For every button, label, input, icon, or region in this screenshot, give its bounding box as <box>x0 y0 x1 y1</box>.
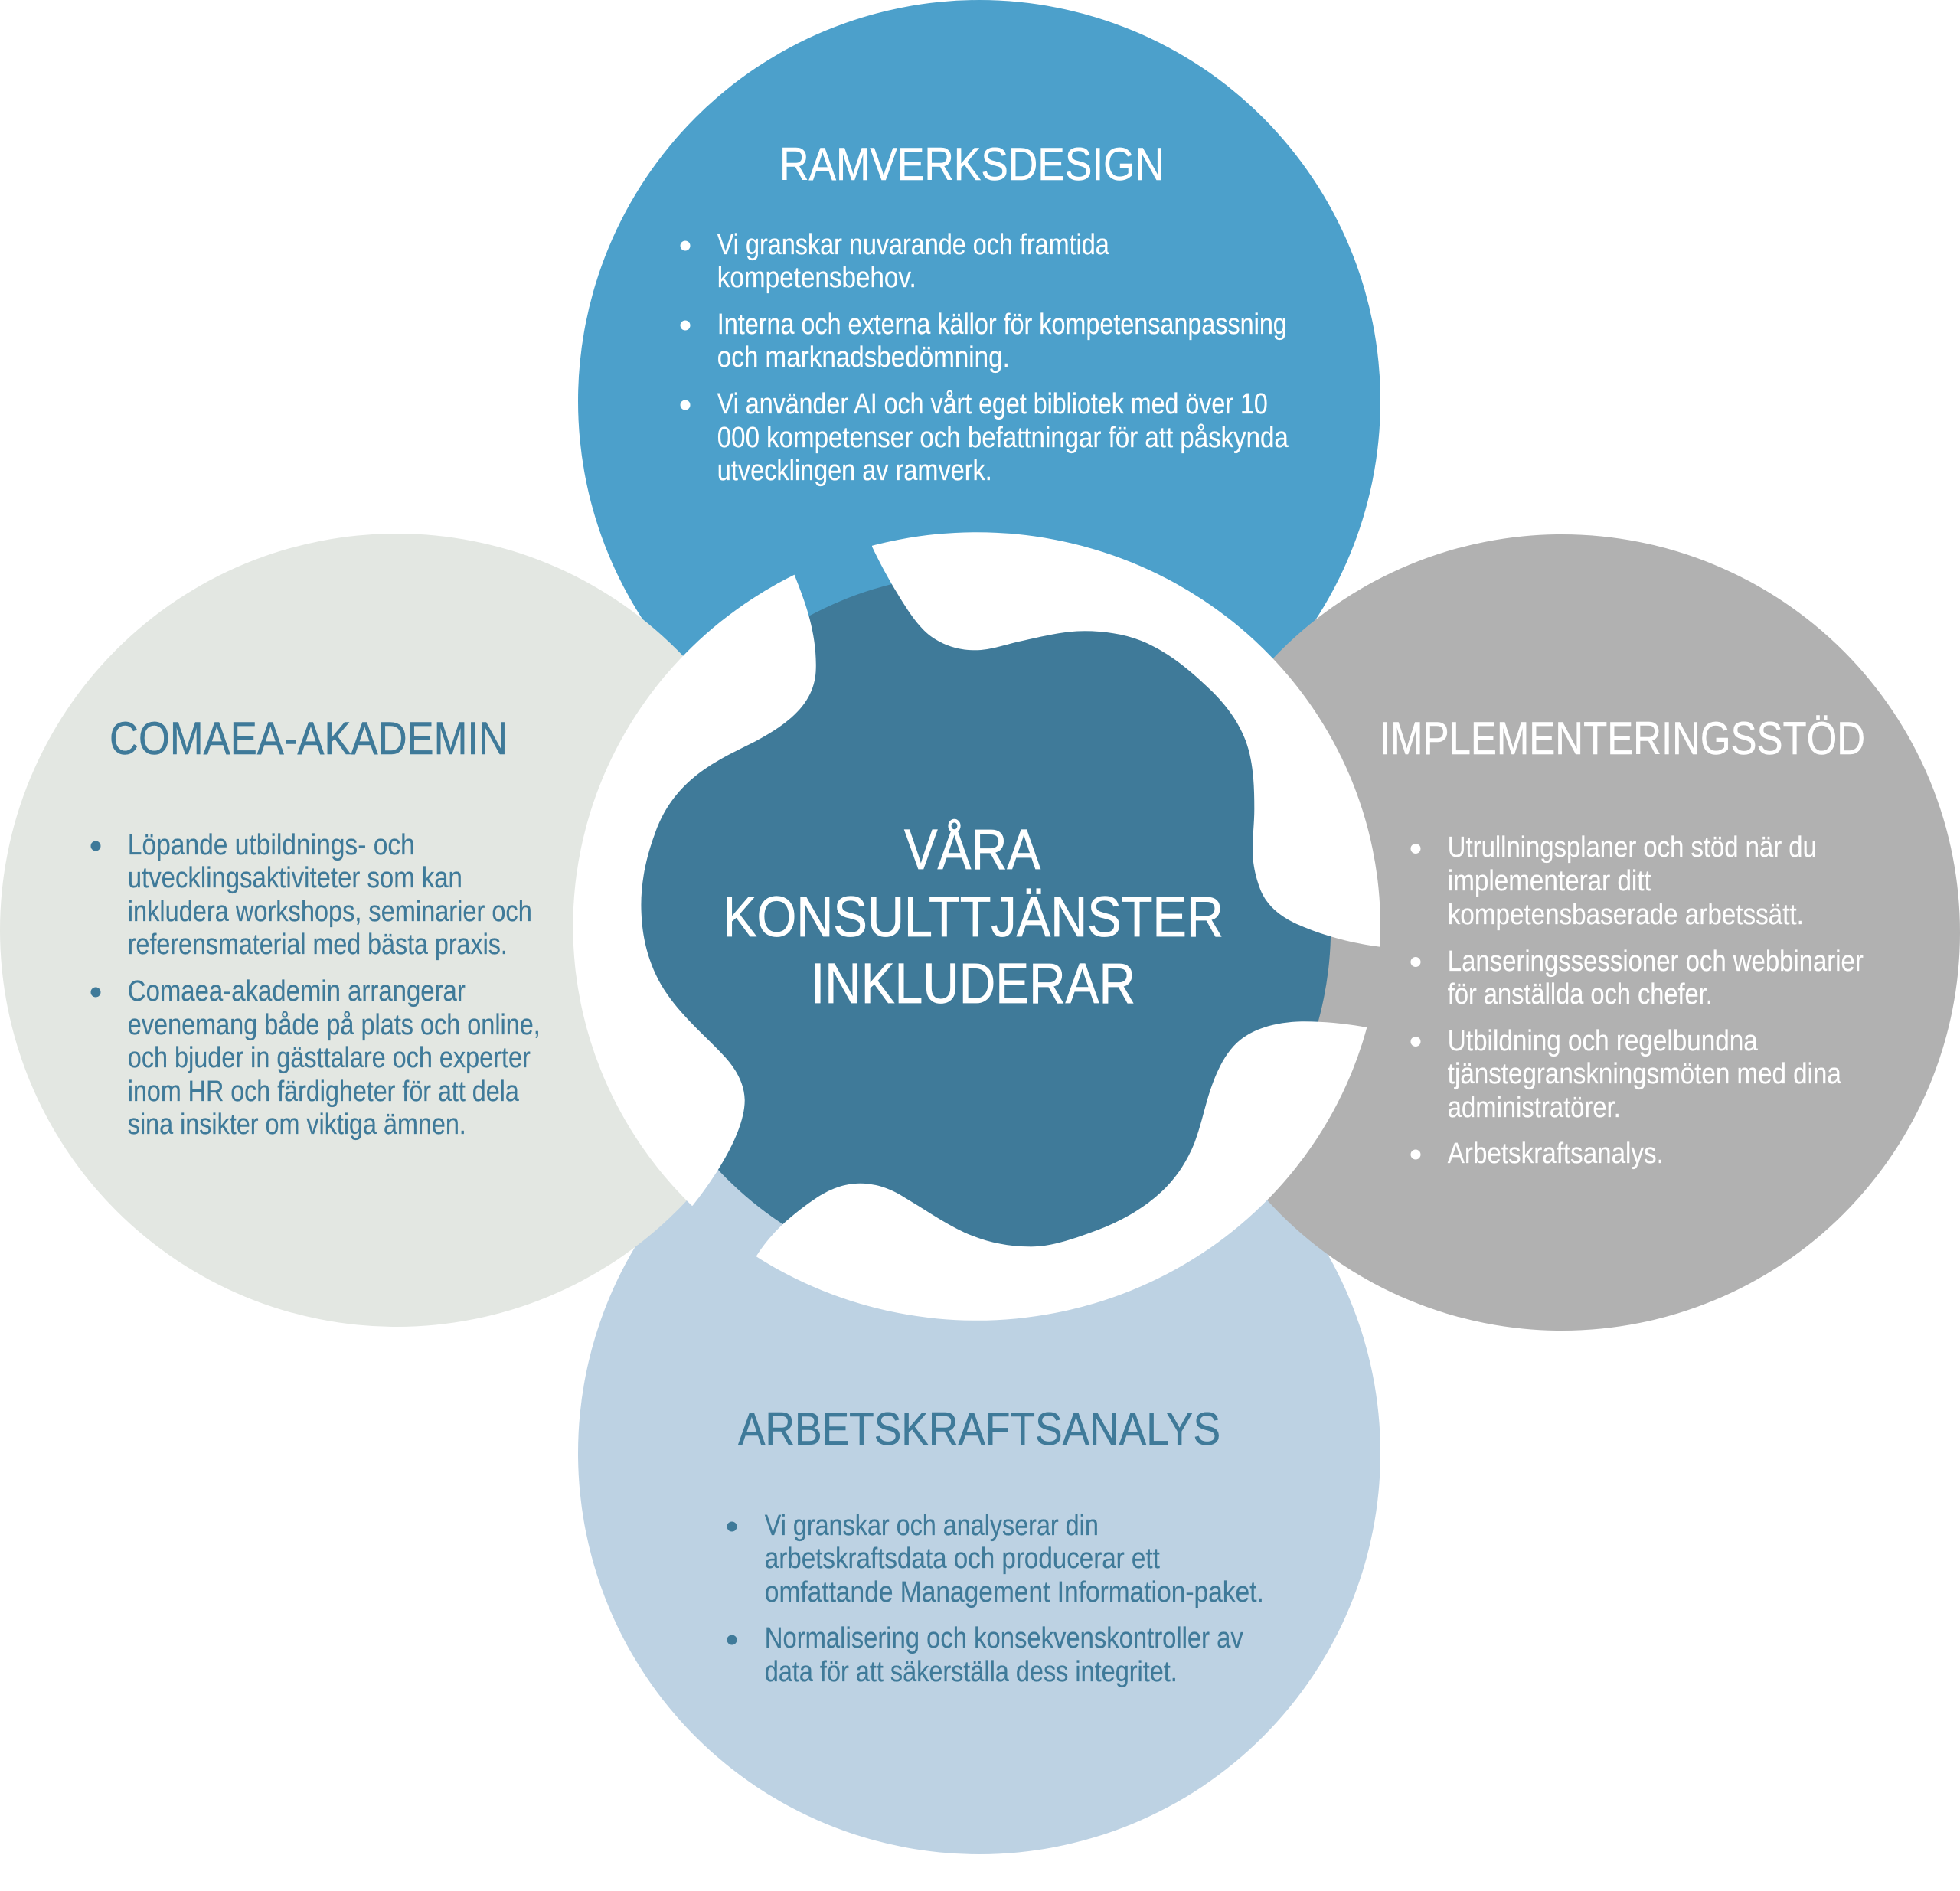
bullet list: comaea-akademin: evenemang både på plats och online, <box>128 1009 541 1041</box>
bullet list: arbetskraftsanalys: Vi granskar och analyserar din <box>765 1510 1099 1542</box>
bullet list: implementeringsstöd: Lanseringssessioner och webbinarier <box>1448 946 1864 978</box>
bullet list: comaea-akademin: referensmaterial med bästa praxis. <box>128 929 508 961</box>
bullet list: ramverksdesign: utvecklingen av ramverk. <box>717 455 992 487</box>
bullet list: implementeringsstöd: kompetensbaserade arbetssätt. <box>1448 899 1804 931</box>
bullet list: arbetskraftsanalys <box>727 1510 1264 1688</box>
bullet list: ramverksdesign: Interna och externa källor för kompetensanpassning <box>717 309 1287 341</box>
bullet list: implementeringsstöd: för anställda och chefer. <box>1448 978 1713 1011</box>
heading: implementeringsstöd: IMPLEMENTERINGSSTÖD <box>1380 713 1865 764</box>
bullet list: comaea-akademin: inkludera workshops, seminarier och <box>128 896 532 928</box>
bullet list: ramverksdesign: Vi använder AI och vårt eget bibliotek med över 10 <box>717 388 1268 420</box>
central title: VÅRA <box>904 818 1041 881</box>
bullet list: ramverksdesign <box>681 229 1289 487</box>
bullet list: implementeringsstöd: Arbetskraftsanalys. <box>1448 1138 1664 1170</box>
bullet list: comaea-akademin: utvecklingsaktiviteter som kan <box>128 862 462 894</box>
bullet list: arbetskraftsanalys: arbetskraftsdata och producerar ett <box>765 1543 1160 1575</box>
bullet list: comaea-akademin: och bjuder in gästtalare och experter <box>128 1042 531 1074</box>
bullet list: ramverksdesign: 000 kompetenser och befattningar för att påskynda <box>717 422 1289 454</box>
central swirl <box>573 532 1380 1321</box>
bullet list: ramverksdesign: Vi granskar nuvarande och framtida <box>717 229 1110 261</box>
bullet list: comaea-akademin: sina insikter om viktiga ämnen. <box>128 1109 466 1141</box>
bullet list: implementeringsstöd: tjänstegranskningsmöten med dina <box>1448 1058 1842 1090</box>
panel: implementeringsstöd <box>1164 534 1960 1331</box>
heading: ramverksdesign: RAMVERKSDESIGN <box>779 139 1165 190</box>
central title: INKLUDERAR <box>811 952 1135 1015</box>
bullet list: ramverksdesign: och marknadsbedömning. <box>717 341 1010 374</box>
bullet list: implementeringsstöd: Utbildning och regelbundna <box>1448 1025 1759 1057</box>
swirl fin: left <box>573 574 816 1206</box>
panel: comaea-akademin <box>0 534 793 1327</box>
bullet list: arbetskraftsanalys: omfattande Management Information-paket. <box>765 1576 1264 1608</box>
bullet list: comaea-akademin: Comaea-akademin arrangerar <box>128 975 466 1008</box>
bullet list: comaea-akademin: inom HR och färdigheter för att dela <box>128 1076 520 1108</box>
swirl fin: top right <box>872 532 1380 947</box>
heading: comaea-akademin: COMAEA-AKADEMIN <box>109 713 508 764</box>
central title <box>723 818 1223 1015</box>
bullet list: comaea-akademin: Löpande utbildnings- och <box>128 829 415 861</box>
bullet list: implementeringsstöd: administratörer. <box>1448 1092 1621 1124</box>
bullet list: comaea-akademin <box>91 829 541 1141</box>
panel: arbetskraftsanalys <box>578 1052 1380 1854</box>
swirl fin: bottom <box>756 1021 1367 1321</box>
bullet list: implementeringsstöd <box>1411 831 1864 1170</box>
panel: ramverksdesign <box>578 0 1380 802</box>
heading: arbetskraftsanalys: ARBETSKRAFTSANALYS <box>738 1403 1220 1455</box>
bullet list: implementeringsstöd: implementerar ditt <box>1448 865 1651 897</box>
bullet list: ramverksdesign: kompetensbehov. <box>717 262 916 294</box>
bullet list: implementeringsstöd: Utrullningsplaner och stöd när du <box>1448 831 1817 864</box>
bullet list: arbetskraftsanalys: data för att säkerställa dess integritet. <box>765 1656 1178 1688</box>
bullet list: arbetskraftsanalys: Normalisering och konsekvenskontroller av <box>765 1622 1243 1654</box>
central title: KONSULTTJÄNSTER <box>723 885 1223 949</box>
